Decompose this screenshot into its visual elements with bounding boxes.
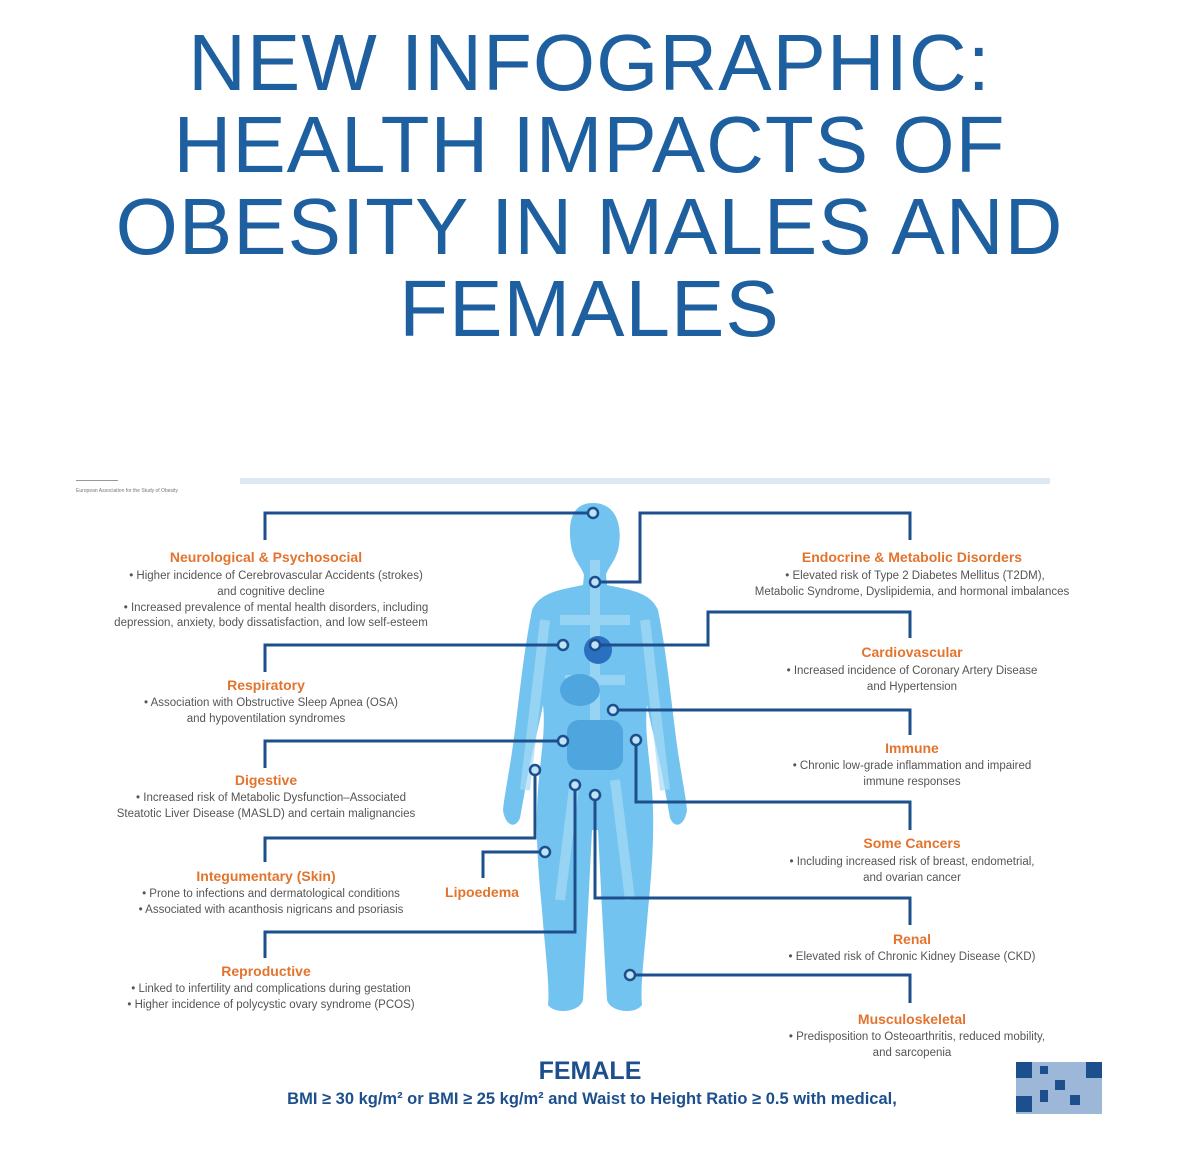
text: musculoskeletal: and sarcopenia xyxy=(873,1047,952,1059)
text: renal: Renal xyxy=(893,931,931,947)
text: endocrine xyxy=(755,549,1069,598)
body silhouette xyxy=(503,503,687,1011)
text: respiratory: and hypoventilation syndromes xyxy=(187,713,346,725)
text: integumentary xyxy=(139,868,404,916)
text: cancers: and ovarian cancer xyxy=(863,872,961,884)
text: respiratory xyxy=(144,677,398,725)
text: cancers: Some Cancers xyxy=(863,835,961,851)
text: neurological: depression, anxiety, body dissatisfaction, and low self-esteem xyxy=(114,617,428,629)
title: OBESITY IN MALES AND xyxy=(116,182,1063,271)
title: HEALTH IMPACTS OF xyxy=(174,100,1005,189)
connector lines xyxy=(265,508,910,1003)
text: renal xyxy=(789,931,1036,963)
text: cardiovascular: and Hypertension xyxy=(867,681,957,693)
text: cardiovascular xyxy=(787,644,1037,693)
text: cancers: • Including increased risk of breast, endometrial, xyxy=(789,856,1035,868)
text: neurological: and cognitive decline xyxy=(217,586,325,598)
text: neurological: Neurological & Psychosocial xyxy=(170,549,362,565)
header fragments xyxy=(76,478,1050,494)
text: endocrine: Metabolic Syndrome, Dyslipidemia, and hormonal imbalances xyxy=(755,586,1069,598)
text: lipoedema: Lipoedema xyxy=(445,884,519,900)
text: immune: Immune xyxy=(885,740,939,756)
text: musculoskeletal xyxy=(789,1011,1045,1059)
female label: FEMALE xyxy=(539,1057,641,1085)
text: reproductive xyxy=(127,963,415,1011)
text: respiratory: • Association with Obstructive Sleep Apnea (OSA) xyxy=(144,697,398,709)
text: reproductive: • Linked to infertility and complications during gestation xyxy=(131,983,411,995)
text: integumentary: • Associated with acanthosis nigricans and psoriasis xyxy=(139,904,404,916)
text: immune: • Chronic low-grade inflammation and impaired xyxy=(793,760,1031,772)
text: cardiovascular: • Increased incidence of Coronary Artery Disease xyxy=(787,665,1037,677)
header fragments: European Association for the Study of Obesity xyxy=(76,488,179,494)
text: neurological: • Increased prevalence of mental health disorders, including xyxy=(124,602,428,614)
text: respiratory: Respiratory xyxy=(227,677,305,693)
text: neurological: • Higher incidence of Cerebrovascular Accidents (strokes) xyxy=(129,570,423,582)
text: musculoskeletal: Musculoskeletal xyxy=(858,1011,966,1027)
text: digestive: Steatotic Liver Disease (MASLD) and certain malignancies xyxy=(117,808,415,820)
text: musculoskeletal: • Predisposition to Osteoarthritis, reduced mobility, xyxy=(789,1031,1045,1043)
text: reproductive: Reproductive xyxy=(221,963,311,979)
BMI criteria: BMI ≥ 30 kg/m² or BMI ≥ 25 kg/m² and Waist to Height Ratio ≥ 0.5 with medical, xyxy=(287,1090,897,1108)
text: cancers xyxy=(789,835,1035,884)
text: digestive: Digestive xyxy=(235,772,297,788)
title xyxy=(116,18,1063,353)
text: digestive: • Increased risk of Metabolic Dysfunction–Associated xyxy=(136,792,406,804)
text: digestive xyxy=(117,772,415,820)
text: renal: • Elevated risk of Chronic Kidney Disease (CKD) xyxy=(789,951,1036,963)
text: reproductive: • Higher incidence of polycystic ovary syndrome (PCOS) xyxy=(127,999,415,1011)
text: cardiovascular: Cardiovascular xyxy=(861,644,963,660)
text: integumentary: Integumentary (Skin) xyxy=(196,868,336,884)
text: neurological xyxy=(114,549,428,629)
text: integumentary: • Prone to infections and dermatological conditions xyxy=(142,888,400,900)
QR code xyxy=(1016,1062,1102,1114)
text: endocrine: Endocrine & Metabolic Disorders xyxy=(802,549,1022,565)
text: immune xyxy=(793,740,1031,788)
text: immune: immune responses xyxy=(863,776,961,788)
text: endocrine: • Elevated risk of Type 2 Diabetes Mellitus (T2DM), xyxy=(785,570,1045,582)
title: NEW INFOGRAPHIC: xyxy=(188,18,991,107)
title: FEMALES xyxy=(399,264,780,353)
